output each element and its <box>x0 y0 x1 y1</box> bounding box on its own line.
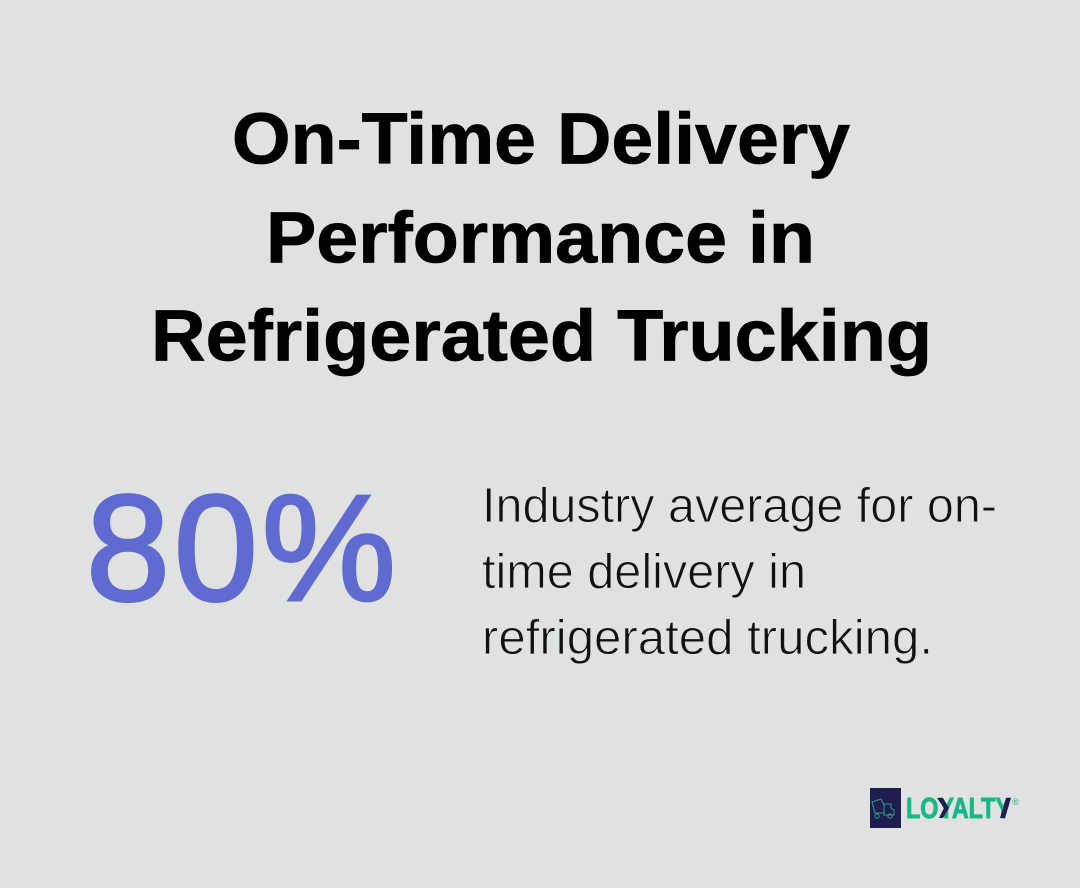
logo wordmark: LOYALTY <box>906 793 1011 825</box>
icon: truck badge <box>870 788 901 828</box>
title: Refrigerated Trucking <box>151 296 932 376</box>
title: On-Time Delivery <box>232 100 850 180</box>
registered mark: ® <box>1012 797 1019 807</box>
title: Performance in <box>266 198 815 278</box>
description text <box>482 479 997 665</box>
logo accent: dark chevrons <box>937 798 1011 818</box>
statistic: 80%: 80% <box>86 463 396 632</box>
description text: time delivery in <box>482 545 806 599</box>
logo: Loyalty <box>870 788 1019 828</box>
description text: refrigerated trucking. <box>482 611 933 665</box>
title <box>151 100 932 376</box>
description text: Industry average for on- <box>482 479 997 533</box>
